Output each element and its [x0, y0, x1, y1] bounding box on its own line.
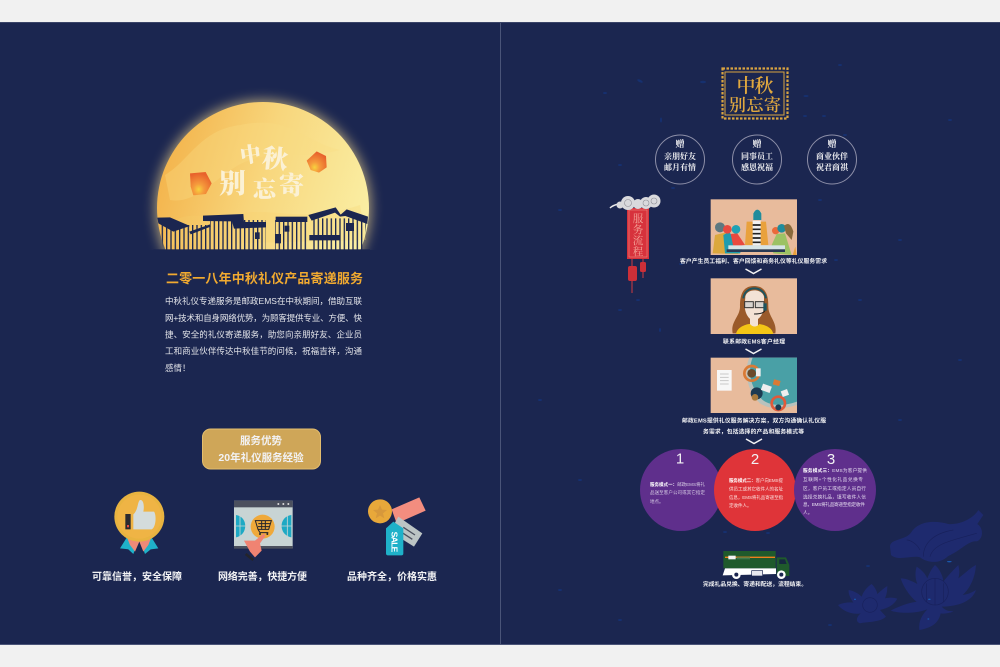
service process banner: 流	[633, 234, 644, 247]
gift circle 2: 赠	[752, 138, 762, 149]
left page	[0, 22, 500, 645]
service mode 1	[640, 449, 722, 531]
gift circle 1	[656, 135, 704, 184]
seal title: 中秋	[736, 71, 774, 98]
feature label 3: 品种齐全，价格实惠	[347, 570, 437, 583]
arrow	[746, 269, 762, 274]
seal title	[722, 68, 788, 118]
service mode 2	[714, 449, 796, 531]
service process banner: 程	[633, 245, 644, 258]
service process banner	[610, 194, 660, 293]
intro paragraph: 工和商业伙伴传达中秋佳节的问候，祝福吉祥，沟通	[165, 346, 362, 356]
service mode 1: 地点。	[650, 498, 664, 505]
service mode 3: 服务模式三：EMS为客户提供	[803, 467, 867, 474]
service mode 3: 人。	[803, 510, 812, 515]
icon: medal thumbs up	[114, 492, 164, 554]
service mode 2: 服务模式二：客户向EMS提	[729, 477, 784, 484]
service mode 3: 选择兑换礼品，填写收件人信	[803, 494, 866, 500]
service mode 2: 2	[751, 451, 759, 468]
final caption: 完成礼品兑换、寄递和配送，流程结束。	[703, 580, 807, 588]
gift circle 3: 祝君商祺	[816, 162, 849, 172]
gift circle 1: 邮月有情	[664, 162, 696, 172]
gift circle 2: 感恩祝福	[741, 162, 773, 172]
feature label 1: 可靠信誉，安全保障	[92, 570, 182, 583]
service process banner: 服	[633, 213, 644, 225]
moon illustration	[146, 91, 380, 250]
service mode 1: 1	[676, 450, 684, 468]
seal title: 别忘寄	[729, 91, 781, 116]
decoration: lotus flowers and leaf	[838, 510, 983, 630]
gift circle 3	[808, 135, 856, 184]
service mode 3: 区，客户员工或指定人员自行	[803, 485, 866, 492]
right page	[501, 22, 1000, 645]
moon title: 秋	[260, 138, 290, 177]
intro paragraph	[165, 296, 362, 373]
step 3 illustration: solution discussion	[711, 358, 797, 413]
service mode 1: 服务模式一：邮政EMS将礼	[650, 481, 706, 488]
service advantage badge: 服务优势	[240, 434, 282, 447]
icon: price tags: SALE	[389, 532, 399, 553]
moon title: 寄	[279, 166, 304, 202]
houses silhouette	[153, 207, 370, 251]
icon: price tags	[368, 497, 426, 555]
service mode 2: 信息，EMS将礼品寄递至指	[729, 494, 784, 501]
icon: online shopping window	[234, 501, 293, 560]
step 3 caption: 务需求，包括选择的产品和服务模式等	[703, 428, 804, 436]
service process banner: 务	[633, 223, 644, 236]
arrow	[746, 349, 762, 354]
intro paragraph: 中秋礼仪专递服务是邮政EMS在中秋期间，借助互联	[165, 296, 362, 306]
intro paragraph: 网+技术和自身网络优势，为顾客提供专业、方便、快	[165, 313, 362, 323]
gift circle 2	[732, 135, 782, 184]
service mode 3: 息，EMS将礼品寄递至指定收件	[803, 501, 865, 508]
moon title	[219, 138, 304, 204]
moon title: 别	[219, 162, 246, 201]
gift circle 3: 商业伙伴	[816, 151, 848, 161]
moon title: 中	[238, 138, 263, 170]
service mode 3: 3	[827, 451, 835, 468]
step 3 caption	[682, 416, 826, 436]
gift circle 3: 赠	[827, 138, 837, 149]
step 1 caption: 客户产生员工福利、客户回馈和商务礼仪等礼仪服务需求	[680, 257, 827, 265]
lanterns	[190, 151, 327, 195]
service mode 2: 供员工或其它收件人的名址	[729, 486, 784, 492]
service advantage badge: 20年礼仪服务经验	[218, 451, 304, 464]
gift circle 1: 亲朋好友	[664, 151, 696, 161]
intro paragraph: 感情！	[165, 363, 191, 373]
service advantage badge	[202, 429, 320, 469]
service mode 3: 互联网+个性化礼品兑换专	[803, 476, 863, 483]
service mode 1: 品送至客户公司或其它指定	[650, 489, 706, 496]
service mode 2: 定收件人。	[729, 502, 752, 509]
gift circle 2: 同事员工	[741, 151, 773, 161]
step 3 caption: 邮政EMS提供礼仪服务解决方案，双方沟通确认礼仪服	[682, 416, 826, 424]
step 1 illustration: team meeting	[711, 199, 797, 255]
gift circle 1: 赠	[675, 138, 685, 149]
icon: EMS truck	[723, 551, 789, 579]
intro paragraph: 捷、安全的礼仪寄递服务，助您向亲朋好友、企业员	[165, 330, 362, 340]
heading: 二零一八年中秋礼仪产品寄递服务	[166, 271, 363, 286]
step 2 caption: 联系邮政EMS客户经理	[723, 338, 785, 346]
step 2 illustration: customer manager	[711, 278, 797, 334]
service mode 3	[794, 449, 876, 531]
arrow	[746, 439, 762, 444]
feature label 2: 网络完善，快捷方便	[218, 570, 307, 583]
moon title: 忘	[253, 171, 279, 204]
